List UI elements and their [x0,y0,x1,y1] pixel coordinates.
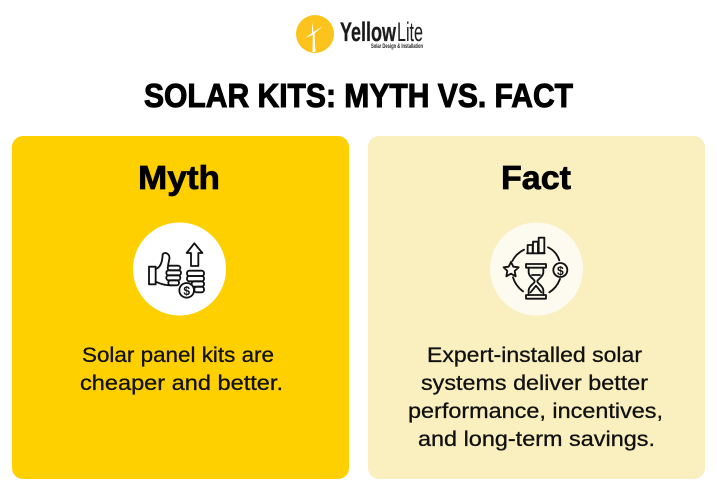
fact heading: Fact [501,159,571,196]
logo sun with turbine [296,15,334,53]
panel: fact [368,136,705,479]
logo wordmark light: Lite [397,17,423,47]
panel: myth [12,136,349,479]
dollar sign: $ [557,264,564,278]
fact background [368,136,705,479]
fact text: and long-term savings. [418,428,655,451]
logo [296,15,423,53]
icon: thumbs up, coins and arrow [133,222,226,316]
fact text [408,344,663,451]
myth background [12,136,349,479]
fact text: Expert-installed solar [427,344,642,367]
myth text: Solar panel kits are [82,344,274,367]
icon: hourglass, chart, star and coin [490,222,583,316]
fact text: performance, incentives, [408,400,663,423]
logo tagline: Solar Design & Installation [371,44,423,50]
title: SOLAR KITS: MYTH VS. FACT [144,77,573,114]
logo wordmark: Yellow [340,17,397,47]
fact text: systems deliver better [421,372,648,395]
dollar sign: $ [183,284,190,298]
myth text: cheaper and better. [80,372,283,395]
myth heading: Myth [138,159,220,196]
myth text [80,344,283,395]
